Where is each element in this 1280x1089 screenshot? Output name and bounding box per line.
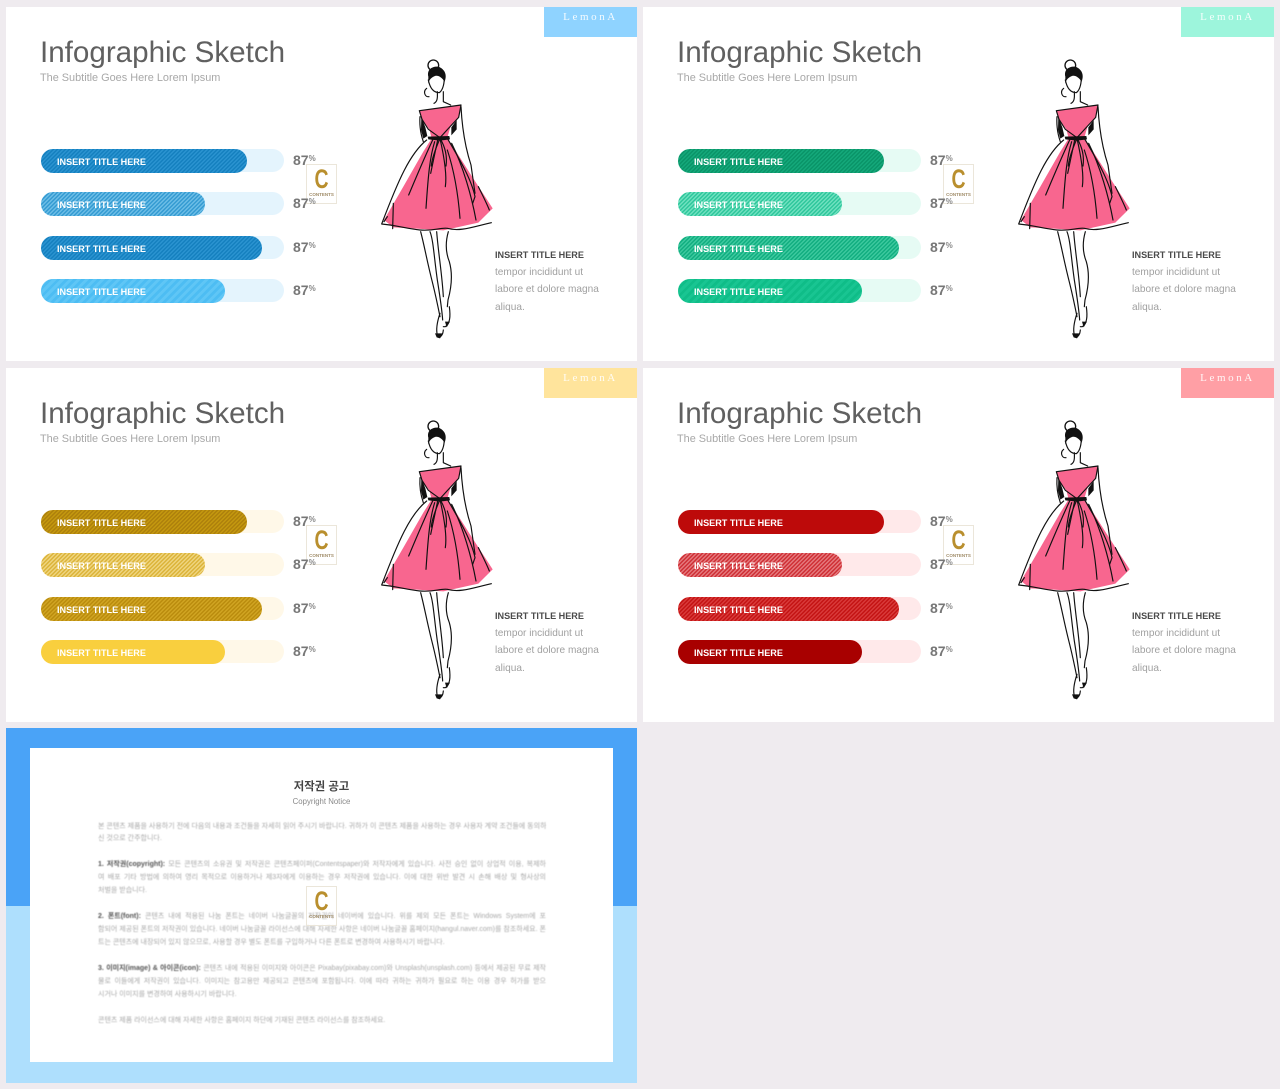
panel: blue variant [6,7,637,361]
side text block: tempor incididunt ut [495,628,583,639]
bar 2 [41,553,284,576]
bar 3: INSERT TITLE HERE [694,605,783,615]
bar 4 [678,279,921,302]
watermark logo: CONTENTS [946,553,971,558]
notice body text: 함되어 제공된 폰트의 저작권이 있습니다. 네이버 나눔글꼴 라이선스에 대해 자세한 사항은 네이버 나눔글꼴 홈페이지(hangul.naver.com)를 참조하세요. 폰 [98,926,546,933]
tag: LemonA [1181,368,1274,398]
bar 2 [678,192,921,215]
bar 3 [41,236,284,259]
illustration: woman in pink dress [1018,420,1130,700]
watermark logo: CONTENTS [309,914,334,919]
tag: LemonA: LemonA [563,11,618,23]
bar 1: INSERT TITLE HERE [57,157,146,167]
tag: LemonA [544,368,637,398]
subtitle: The Subtitle Goes Here Lorem Ipsum [677,433,857,445]
subtitle: The Subtitle Goes Here Lorem Ipsum [40,433,220,445]
notice body text: 물로 이들에게 저작권이 있습니다. 이미지는 참고용만 제공되고 콘텐츠에 포함됩니다. 이에 따라 귀하는 귀하가 필요로 하는 이용 경우 허가를 받으 [98,978,546,985]
notice subtitle: Copyright Notice [293,797,350,806]
bar 3 [41,597,284,620]
bar 1: INSERT TITLE HERE [694,157,783,167]
bar 3: INSERT TITLE HERE [57,605,146,615]
bar 4 [41,279,284,302]
side text block: tempor incididunt ut [1132,267,1220,278]
side text block: INSERT TITLE HERE [495,250,584,260]
watermark logo [306,164,337,204]
watermark logo: CONTENTS [309,192,334,197]
bar 1 [678,149,921,172]
watermark logo: C [314,164,329,194]
bar 4: INSERT TITLE HERE [694,648,783,658]
notice body text: 여 배포 기타 방법에 의하여 영리 목적으로 이용하거나 제3자에게 이용하는 경우 저작권에 있습니다. 이에 대한 위반 발견 시 손해 배상 및 형사상의 [98,874,546,881]
subtitle: The Subtitle Goes Here Lorem Ipsum [40,72,220,84]
side text block: aliqua. [1132,663,1162,674]
side text block [1132,611,1236,674]
side text block: aliqua. [1132,302,1162,313]
bar 4: INSERT TITLE HERE [694,287,783,297]
bar 4 value: 87% [293,643,315,659]
subtitle: The Subtitle Goes Here Lorem Ipsum [677,72,857,84]
notice card [30,748,613,1062]
watermark logo: C [314,886,329,916]
side text block: INSERT TITLE HERE [1132,611,1221,621]
watermark logo: C [951,525,966,555]
notice body text: 2. 폰트(font): 콘텐츠 내에 적용된 나눔 폰트는 네이버 나눔글꼴의 저작권이 네이버에 있습니다. 위를 제외 모든 폰트는 Windows System에 포 [98,913,546,920]
bar 1 value: 87% [930,152,952,168]
title: Infographic Sketch [40,36,285,69]
panel: copyright notice [6,728,637,1083]
bar 2: INSERT TITLE HERE [57,561,146,571]
watermark logo [943,525,974,565]
bar 4 [678,640,921,663]
bar 4 value: 87% [930,282,952,298]
bar 2: INSERT TITLE HERE [57,200,146,210]
bar 3 value: 87% [930,600,952,616]
watermark logo: CONTENTS [946,192,971,197]
bar 1 value: 87% [293,152,315,168]
notice body text: 3. 이미지(image) & 아이콘(icon): 콘텐츠 내에 적용된 이미지와 아이콘은 Pixabay(pixabay.com)와 Unsplash(unsplash.com) 등에서 제공된 무료 제작 [98,965,546,972]
notice title: 저작권 공고 [294,781,349,793]
tag: LemonA: LemonA [1200,372,1255,384]
notice body text: 시거나 이미지를 변경하여 사용하시기 바랍니다. [98,991,237,998]
side text block: aliqua. [495,302,525,313]
illustration: woman in pink dress [381,59,493,338]
side text block: labore et dolore magna [1132,284,1236,295]
title: Infographic Sketch [40,397,285,430]
bar 3 value: 87% [930,239,952,255]
watermark logo: C [314,525,329,555]
bar 1: INSERT TITLE HERE [57,518,146,528]
watermark logo: CONTENTS [309,553,334,558]
panel: green variant [643,7,1274,361]
notice body text: 콘텐츠 제품 라이선스에 대해 자세한 사항은 홈페이지 하단에 기재된 콘텐츠 라이선스를 참조하세요. [98,1017,385,1024]
notice body text [98,822,546,1024]
illustration: woman in pink dress [381,420,493,700]
tag: LemonA: LemonA [563,372,618,384]
bar 4: INSERT TITLE HERE [57,648,146,658]
side text block [1132,250,1236,313]
tag: LemonA [1181,7,1274,37]
bar 1 value: 87% [930,513,952,529]
bar 2 [678,553,921,576]
side text block [495,611,599,674]
watermark logo [306,886,337,926]
bar 2 value: 87% [930,556,952,572]
side text block: INSERT TITLE HERE [1132,250,1221,260]
bar 2 value: 87% [930,195,952,211]
panel: red variant [643,368,1274,722]
bar 1 value: 87% [293,513,315,529]
bar 3 value: 87% [293,239,315,255]
notice body text: 1. 저작권(copyright): 모든 콘텐츠의 소유권 및 저작권은 콘텐츠페이퍼(Contentspaper)와 저작자에게 있습니다. 사전 승인 없이 상업적 이용, 복제하 [98,861,546,868]
panel: yellow variant [6,368,637,722]
notice body text: 신 것으로 간주합니다. [98,835,162,842]
bar 4 value: 87% [930,643,952,659]
bar 3: INSERT TITLE HERE [694,244,783,254]
side text block: labore et dolore magna [1132,645,1236,656]
bar 1: INSERT TITLE HERE [694,518,783,528]
tag: LemonA: LemonA [1200,11,1255,23]
side text block: INSERT TITLE HERE [495,611,584,621]
bar 4 value: 87% [293,282,315,298]
bar 1 [41,510,284,533]
watermark logo: C [951,164,966,194]
side text block: tempor incididunt ut [1132,628,1220,639]
bar 3: INSERT TITLE HERE [57,244,146,254]
side text block: aliqua. [495,663,525,674]
title: Infographic Sketch [677,397,922,430]
side text block: labore et dolore magna [495,645,599,656]
side text block: labore et dolore magna [495,284,599,295]
bar 4 [41,640,284,663]
bar 2 [41,192,284,215]
bar 3 [678,236,921,259]
side text block: tempor incididunt ut [495,267,583,278]
bar 2: INSERT TITLE HERE [694,561,783,571]
bar 1 [41,149,284,172]
watermark logo [306,525,337,565]
notice body text: 본 콘텐츠 제품을 사용하기 전에 다음의 내용과 조건들을 자세히 읽어 주시기 바랍니다. 귀하가 이 콘텐츠 제품을 사용하는 경우 사용자 계약 조건들에 동의하 [98,823,546,830]
bar 3 [678,597,921,620]
watermark logo [943,164,974,204]
bar 4: INSERT TITLE HERE [57,287,146,297]
bar 2 value: 87% [293,195,315,211]
tag: LemonA [544,7,637,37]
bar 1 [678,510,921,533]
bar 2 value: 87% [293,556,315,572]
bar 3 value: 87% [293,600,315,616]
bar 2: INSERT TITLE HERE [694,200,783,210]
title: Infographic Sketch [677,36,922,69]
notice body text: 처벌을 받습니다. [98,887,147,894]
illustration: woman in pink dress [1018,59,1130,338]
notice body text: 트는 콘텐츠에 내장되어 있지 않으므로, 사용할 경우 별도 폰트를 구입하거나 다른 폰트로 변경하여 사용하시기 바랍니다. [98,939,445,946]
side text block [495,250,599,313]
